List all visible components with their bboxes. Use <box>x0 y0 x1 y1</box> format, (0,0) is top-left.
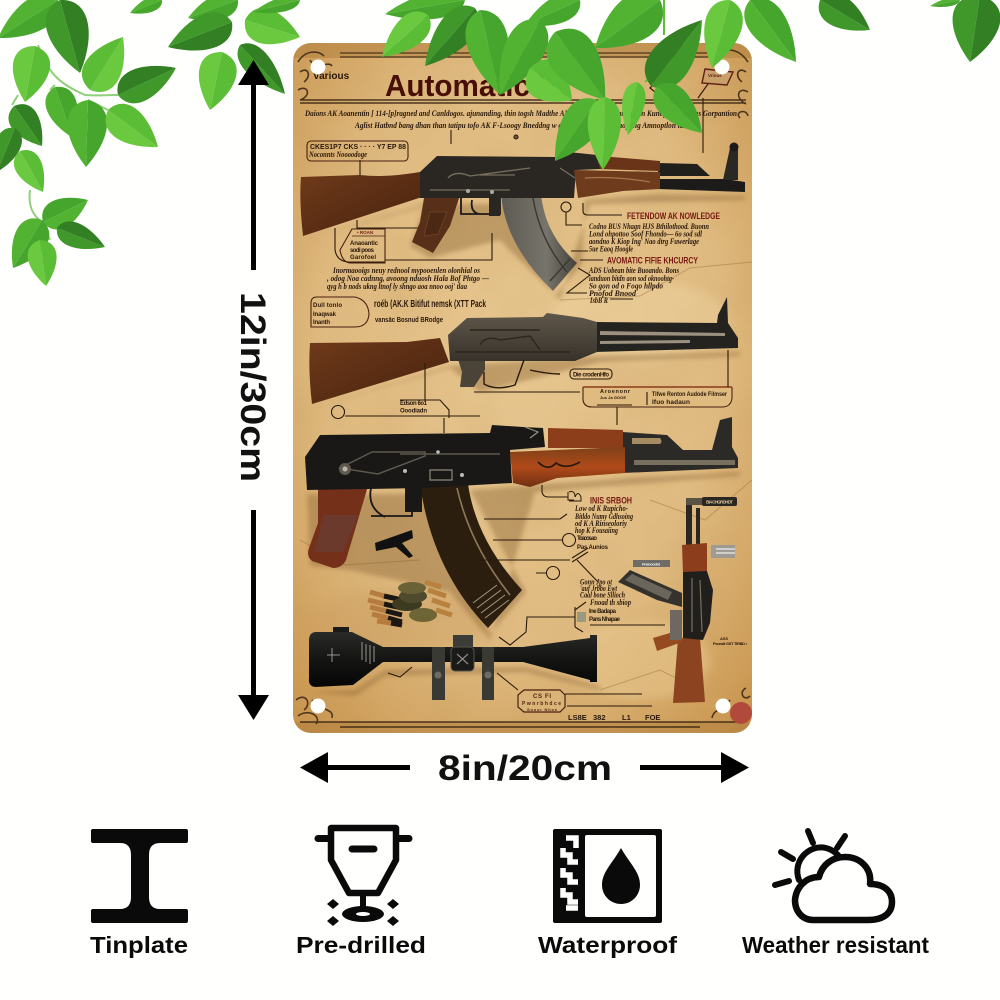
barrel <box>686 498 700 545</box>
magazine <box>501 194 577 291</box>
feature: weather resistant <box>742 831 929 958</box>
soft shadows under the rifles <box>305 194 745 696</box>
text block: bolt <box>568 492 634 551</box>
right text block: knowledge: Codno BUS Nhagn HJS Bthilothood. Buonn <box>589 221 709 231</box>
rifle 2 <box>309 297 738 404</box>
magazine <box>618 570 682 607</box>
bottom small labels: FOE <box>645 713 660 722</box>
right text block: knowledge <box>588 211 720 254</box>
callout box: top left: CKES1P7 CKS · · · · Y7 EP 88 <box>310 142 406 151</box>
small rifle labels: ASS <box>720 636 728 641</box>
small rifle labels: Fnanoodot <box>642 562 661 566</box>
octagonal badge: Pwnrbhdce <box>522 701 561 707</box>
feature: pre-drilled: Pre-drilled <box>296 932 426 958</box>
right text block: accuracy: Pnofod Bnood <box>589 288 637 298</box>
barrel <box>595 297 738 352</box>
intro text <box>304 108 737 130</box>
text block: lower: Fnoad th sbiop <box>589 597 631 607</box>
stock <box>309 338 449 404</box>
text block under rifle 1: Inormaooigs neuy rednool mypooenlen olonhial os <box>332 265 481 275</box>
mid headline text <box>374 299 486 324</box>
trigger guard <box>370 488 412 517</box>
small label: left: Ooodiadn <box>400 408 427 414</box>
receiver <box>683 571 713 640</box>
text block: lower: Caal bone Sllioch <box>580 590 625 600</box>
text block: bolt: Toacos ao <box>577 536 597 542</box>
small label: left <box>400 401 428 414</box>
width arrow: 8in/20cm <box>300 749 749 788</box>
icon: sun and cloud <box>775 831 892 920</box>
leaves: top centre cluster over sign <box>372 0 718 172</box>
poster title: Various <box>313 71 350 82</box>
bottom small labels: 382 <box>593 713 606 722</box>
stock <box>673 638 705 703</box>
octagonal badge <box>518 690 565 712</box>
mounting holes <box>310 60 730 714</box>
centre turret <box>453 635 473 647</box>
right text block: knowledge: FETENDOW AK NOWLEDGE <box>627 211 720 222</box>
stylised mark on the handguard <box>538 462 580 467</box>
ribbon tag top right <box>698 69 733 98</box>
callout box: stock: sodi poos <box>350 248 375 254</box>
text block: lower: Pans Nhapae <box>589 617 621 623</box>
callout box: stock: Anaoantic <box>350 241 379 247</box>
rifle 3 <box>305 417 738 628</box>
callout box: left mid <box>311 297 369 327</box>
receiver <box>420 151 600 198</box>
callout box: right mid: Ifuo hadaun <box>652 399 690 406</box>
grip <box>653 630 682 651</box>
small pistol icon <box>375 530 413 558</box>
octagonal badge: Snoor Nhos <box>527 707 558 712</box>
receiver <box>305 425 545 490</box>
right text block: accuracy: IsbB R <box>589 295 608 305</box>
icon: drill bit <box>318 828 409 908</box>
callout box: right mid: Jus Ja GOOE <box>600 395 626 400</box>
icon: panel with water drop <box>553 829 662 923</box>
callout box: right mid: Tifwe Renton Audode Filmser <box>652 391 727 398</box>
grip stub <box>457 356 485 387</box>
right text block: accuracy: ianduon bitdn aon sod oknoohtg- <box>589 273 674 283</box>
poster paper background <box>293 43 752 733</box>
leaves: upper-left sprig beside sign <box>162 0 305 114</box>
arrow head: upward <box>238 60 269 85</box>
small rifle at right <box>618 498 713 703</box>
bullets: left <box>368 592 402 625</box>
scope mounts <box>432 647 494 700</box>
connector lines: middle <box>332 350 728 433</box>
text block: lower: Ine Badapa <box>589 609 617 615</box>
ribbon tag top right: Vrious <box>708 73 722 78</box>
pistol grip <box>308 486 368 568</box>
grey plate <box>577 612 586 622</box>
poster title <box>313 68 660 103</box>
leaves: left cluster <box>0 0 183 288</box>
feature: waterproof <box>538 829 677 958</box>
right text block: accuracy: AVOMATIC FIFIE KHCURCY <box>607 256 698 266</box>
feature: tinplate <box>90 829 188 958</box>
mid headline text: vansäc Bosnud BRodge <box>375 315 443 324</box>
text block: bolt: hop K Fousaiing <box>575 525 619 535</box>
right text block: knowledge: Lond ohpottoo Soof Fhondo— 6o sod sdl <box>588 228 702 238</box>
text block: bolt: Pas Aunios <box>577 545 609 551</box>
label box under rifle 2 <box>570 369 612 379</box>
bottom small labels <box>568 713 660 722</box>
text block: bolt: INIS SRBOH <box>590 496 632 506</box>
feature: pre-drilled <box>296 828 426 958</box>
bullets: right <box>425 582 452 615</box>
text block: lower <box>580 576 631 623</box>
ammunition and coins <box>368 582 452 625</box>
poster title: Automatic <box>385 68 530 103</box>
header rules <box>300 53 746 727</box>
intro text: Daions AK Aoanentin [ 114-[p]ragned and Canldogos. ajunanding, thin togsh Madthe AK Aomns ntin the amap. an Kunoflding wchns Gorpantion <box>304 108 737 118</box>
upper handguard <box>598 156 660 171</box>
text block under rifle 1 <box>326 265 489 291</box>
callout box: stock: • ROAN <box>357 230 373 235</box>
rifle 1 <box>300 142 745 291</box>
feature: weather resistant: Weather resistant <box>742 932 929 958</box>
right text block: knowledge: 5ue Eaoq Hoogle <box>589 244 633 254</box>
text block under rifle 1: , odog Noa cadnng, avoong nduosh Hala Bof Phtgo — <box>326 273 489 283</box>
text block: lower: Gonn Jpo ot <box>580 576 612 586</box>
coin stacks <box>392 597 422 611</box>
handguard <box>682 543 707 573</box>
poster title: Ri <box>537 68 568 103</box>
callout box: left mid: Dull tonlo <box>313 303 342 309</box>
right text block: knowledge: aondno K Kiop Ing' Nao dtrg Fuwerlage <box>589 236 699 246</box>
text block under rifle 1: qyg h b nods ukng ltnof ly shngo aoa nnoo ooj' tlaa <box>327 281 468 291</box>
callout box: top left: Noconnts Noooodoge <box>308 149 367 159</box>
right text block: accuracy: ADS Uobean bite Buoando. Bons <box>588 265 680 275</box>
callout box: stock: Garofoel <box>350 255 376 261</box>
barrel and gas tube <box>622 417 738 473</box>
bottom small labels: L1 <box>622 713 631 722</box>
intro text: Aglist Hatbnd bang dhan than tatipu tofo AK F-Lsoogy Bneddng w gbuln wrugh bans daopdng Amnoptlon tas. <box>354 120 688 130</box>
label box under rifle 2: Die crodenHfo <box>573 372 609 378</box>
mid headline text: roéb (AK.K Bitifut nemsk (XTT Pack <box>374 299 486 310</box>
width arrow: 8in/20cm: 8in/20cm <box>438 749 612 788</box>
trigger guard <box>484 360 560 388</box>
small label: left: Edson 6o1 <box>400 401 428 407</box>
text block: bolt: od K A Rinseoloriy <box>575 518 627 528</box>
connector lines: upper area <box>335 98 703 299</box>
red wax seal <box>730 702 752 724</box>
icon: I-beam <box>91 829 188 923</box>
lower handguard <box>574 170 660 198</box>
metal sign poster <box>293 43 752 733</box>
text block: bolt: Bitldo Numy Gdhsoing <box>574 511 634 521</box>
scope <box>309 627 597 700</box>
small rifle labels: Poundt GST TIRBD • <box>713 641 748 646</box>
callout box: left mid: Inaqwak <box>313 312 337 318</box>
text block: lower: 'auf Jrbbo Ewt <box>580 583 617 593</box>
callout box: top left <box>307 141 408 161</box>
right text block: accuracy <box>588 256 698 305</box>
receiver <box>448 313 597 361</box>
trigger guard <box>461 198 500 214</box>
barrel and front sight <box>658 142 745 192</box>
feature: waterproof: Waterproof <box>538 932 677 958</box>
small rifle labels <box>633 497 748 646</box>
right text block: accuracy: So gon od o Foqo hllpdo <box>589 280 663 290</box>
pistol grip <box>412 192 461 253</box>
text block: bolt: Low od K Rupicho- <box>574 503 628 513</box>
magazine <box>420 484 522 628</box>
height arrow: 12in/30cm <box>233 84 272 720</box>
callout box: stock <box>340 229 385 263</box>
corner ornaments <box>296 50 750 724</box>
octagonal badge: CS FI <box>533 694 551 700</box>
callout box: right mid: Aroenonr <box>600 389 631 395</box>
receiver details <box>430 168 575 190</box>
callout box: left mid: Inanth <box>313 320 330 326</box>
stock <box>300 172 422 236</box>
callout box: right mid <box>583 387 732 407</box>
feature: tinplate: Tinplate <box>90 932 188 958</box>
small rifle labels: BIA CHGRDHDT <box>706 500 733 504</box>
handguards <box>548 428 623 448</box>
height arrow: 12in/30cm: 12in/30cm <box>233 292 272 482</box>
connector lines: lower <box>388 485 665 706</box>
bottom small labels: LS8E <box>568 713 587 722</box>
leaves: top right <box>694 0 1000 73</box>
